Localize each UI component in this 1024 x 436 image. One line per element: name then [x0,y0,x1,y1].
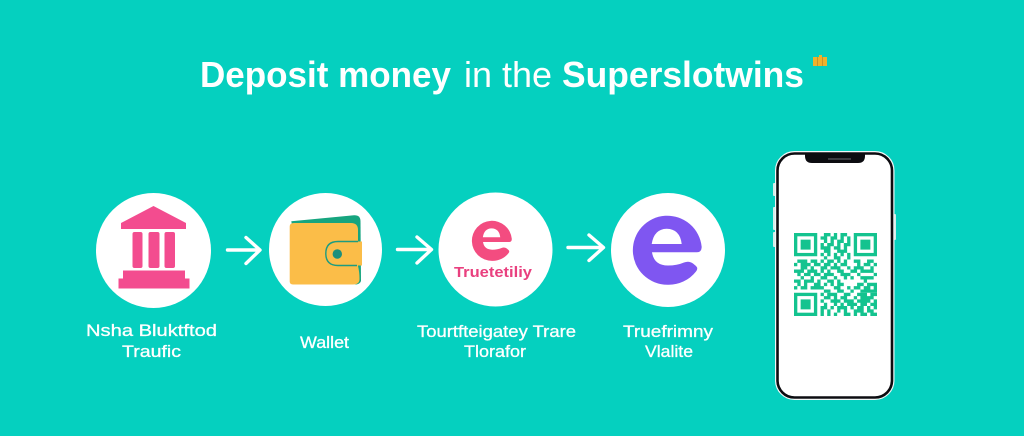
step 2: wallet [269,193,382,352]
icon: purple e logo [633,216,702,285]
title: in the [464,54,552,95]
title: Superslotwins [562,54,804,95]
step 3: pink e-wallet [417,192,576,361]
icon: bank [118,206,190,288]
phone side buttons [773,183,896,247]
step 4 label [623,322,714,361]
step 3 label: Tourtfteigatey Trare [417,322,576,341]
icon: wallet [290,215,362,284]
phone with QR code [773,152,896,400]
title: Deposit money [200,54,451,95]
step 3 label [417,322,576,361]
step 3 brand text: Truetetiliy [454,264,533,281]
step 1 label: Traufic [122,342,182,361]
arrow 2 [398,237,432,263]
arrow 3 [568,235,604,260]
step 1 label: Nsha Bluktftod [86,321,217,340]
arrow 1 [228,238,260,264]
step 4: purple e-wallet [611,193,725,361]
QR code [794,235,877,314]
icon: gold coin stack [813,55,827,66]
icon: pink e logo [472,221,512,261]
step 2 label: Wallet [300,333,349,352]
step 3 label: Tlorafor [464,342,526,361]
step 1: bank transfer [86,193,217,361]
step 4 label: Truefrimny [623,322,714,341]
phone body [776,152,894,400]
step 4 label: Vlalite [645,342,693,361]
step 4 circle [611,193,725,307]
title [200,54,804,95]
phone notch [805,153,865,163]
step 3 circle [438,192,552,306]
step 1 label [86,321,217,361]
step 2 circle [269,193,382,306]
step 1 circle [96,193,211,308]
